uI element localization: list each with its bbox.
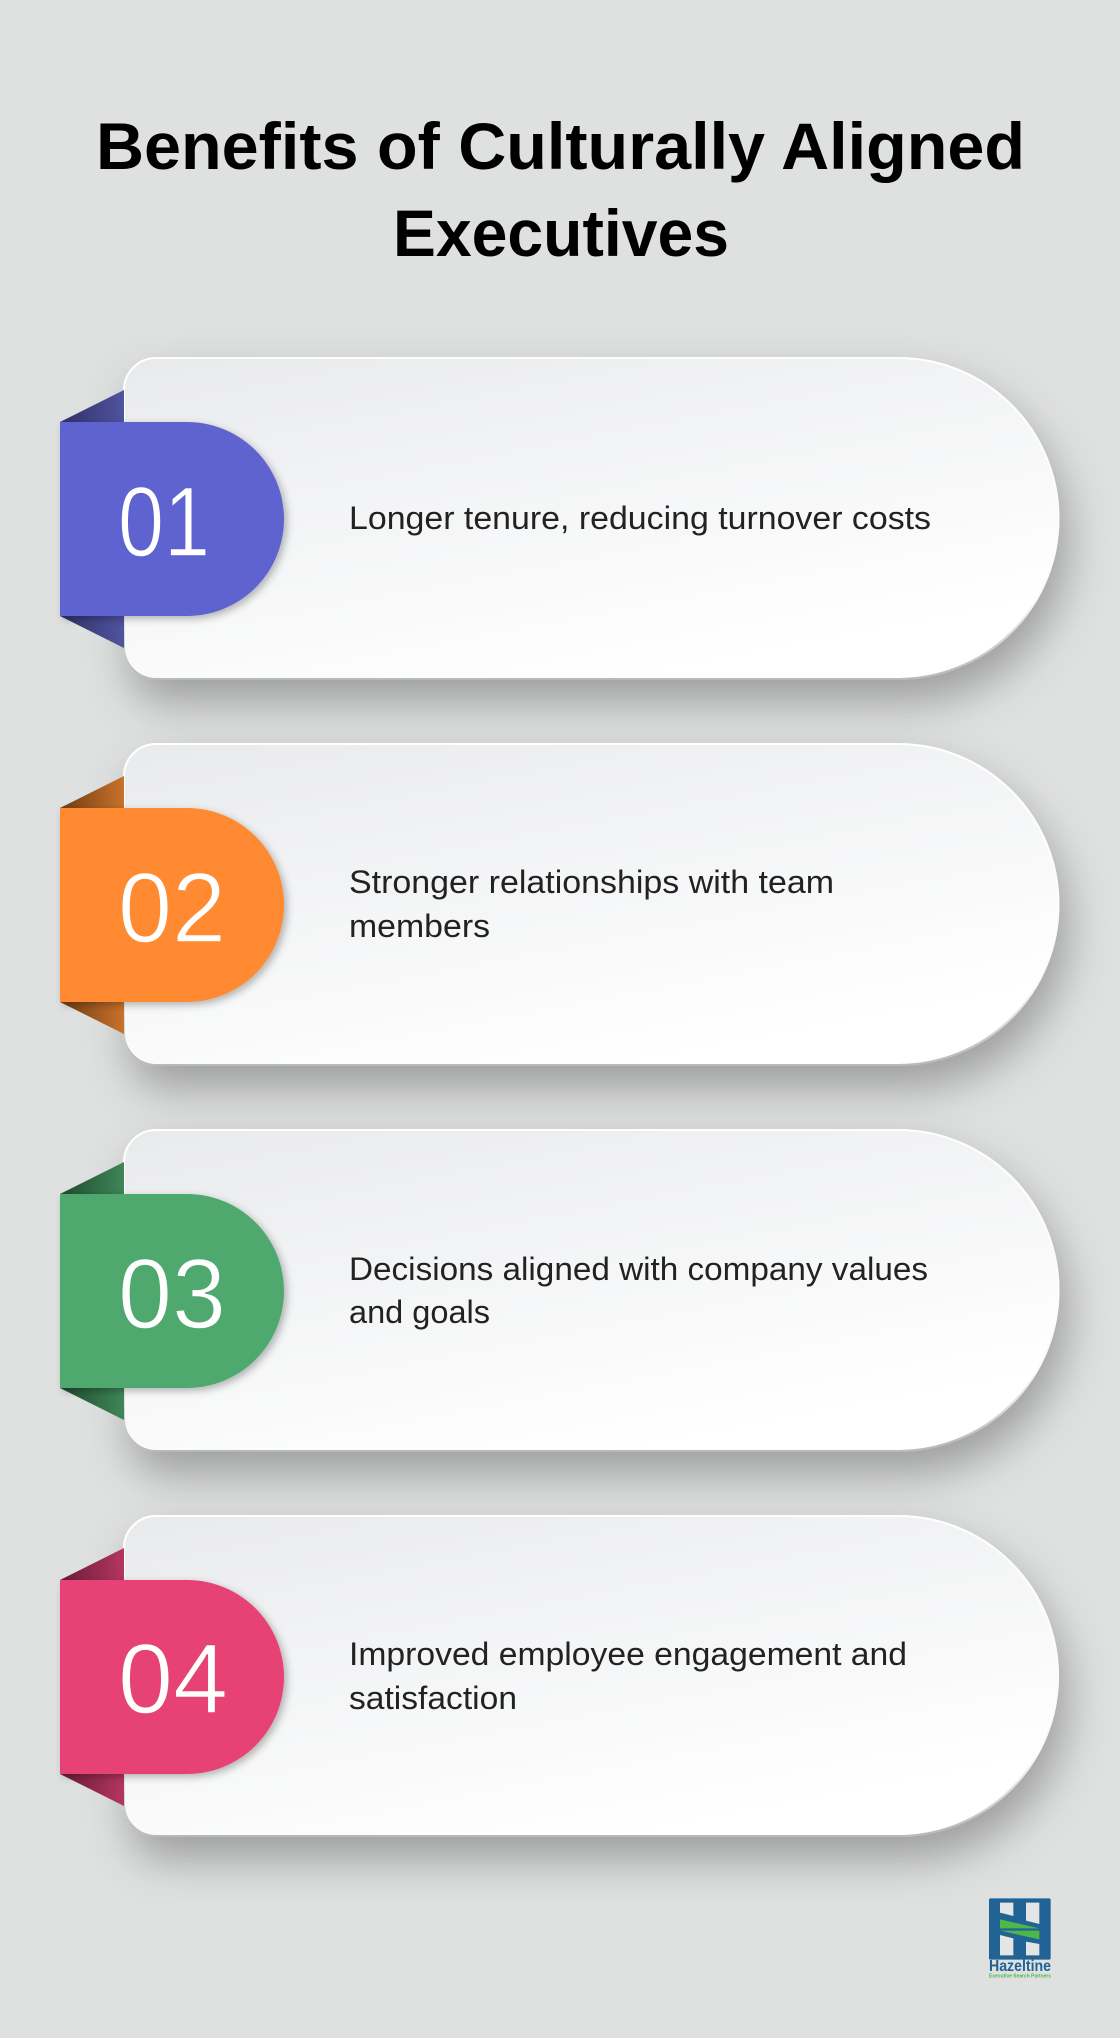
benefit text 04 xyxy=(349,1636,907,1716)
number 03: 03 xyxy=(118,1238,226,1349)
card 03 background xyxy=(124,1130,1058,1451)
panel: benefit 01 xyxy=(60,358,1058,679)
ribbon fold bottom 04 xyxy=(60,1774,124,1806)
panel: benefit 03 xyxy=(60,1130,1058,1451)
ribbon fold top 04 xyxy=(60,1548,124,1580)
number tab 02 xyxy=(60,808,284,1002)
benefit text 03 xyxy=(349,1251,928,1330)
logo tagline: Executive Search Partners xyxy=(989,1974,1051,1980)
logo mark xyxy=(989,1898,1051,1960)
benefit text 04: satisfaction xyxy=(349,1680,517,1716)
number 04: 04 xyxy=(118,1623,228,1734)
ribbon fold top 01 xyxy=(60,390,124,422)
benefit text 03: Decisions aligned with company values xyxy=(349,1251,928,1287)
number tab 03 xyxy=(60,1194,284,1388)
benefit text 03: and goals xyxy=(349,1294,490,1330)
benefit text 02: Stronger relationships with team xyxy=(349,864,834,900)
benefit text 01: Longer tenure, reducing turnover costs xyxy=(349,500,931,536)
panel: benefit 02 xyxy=(60,744,1058,1065)
title xyxy=(96,109,1025,270)
benefit text 02: members xyxy=(349,908,490,944)
number 01: 01 xyxy=(118,466,210,577)
benefit text 04: Improved employee engagement and xyxy=(349,1636,907,1672)
title: Executives xyxy=(393,196,729,270)
ribbon fold bottom 02 xyxy=(60,1002,124,1034)
icon: Hazeltine logo xyxy=(989,1898,1051,1980)
number tab 01 xyxy=(60,422,284,616)
ribbon fold top 02 xyxy=(60,776,124,808)
title: Benefits of Culturally Aligned xyxy=(96,109,1025,183)
ribbon fold bottom 03 xyxy=(60,1388,124,1420)
card 04 background xyxy=(124,1516,1058,1836)
ribbon fold top 03 xyxy=(60,1162,124,1194)
panel: benefit 04 xyxy=(60,1516,1058,1836)
number 02: 02 xyxy=(118,852,226,963)
logo wordmark: Hazeltine xyxy=(989,1958,1051,1975)
number tab 04 xyxy=(60,1580,284,1774)
ribbon fold bottom 01 xyxy=(60,616,124,648)
benefit text 02 xyxy=(349,864,834,944)
card 01 background xyxy=(124,358,1058,679)
card 02 background xyxy=(124,744,1058,1065)
